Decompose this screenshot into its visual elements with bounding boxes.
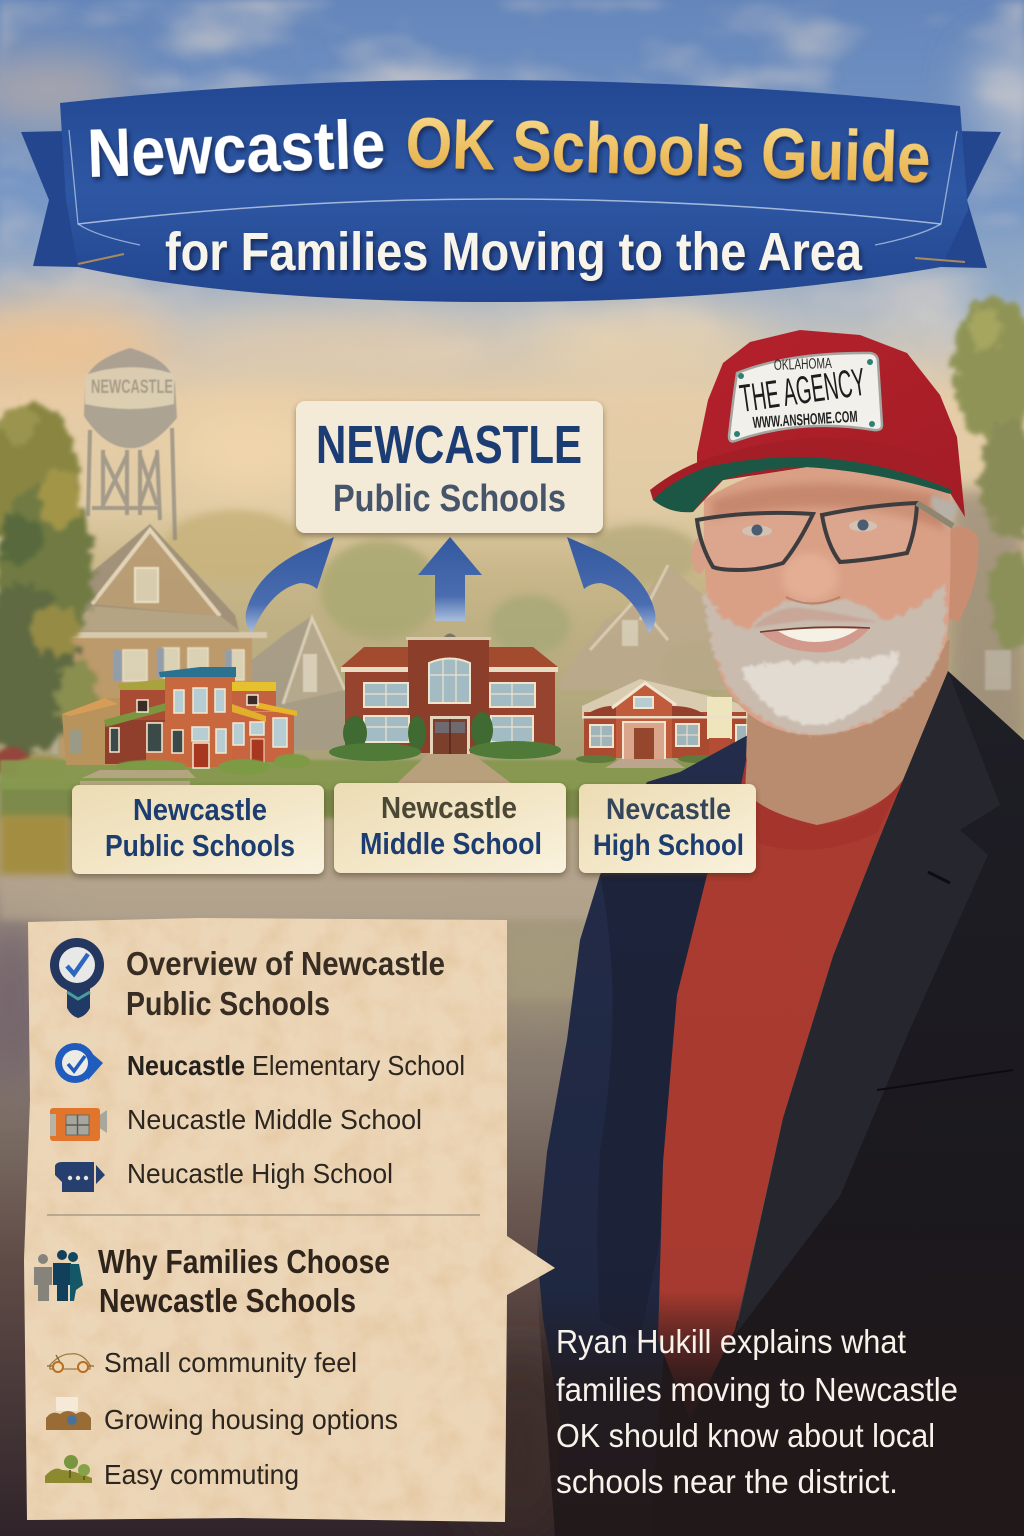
- cap: [650, 330, 965, 517]
- heading: overview: [126, 945, 445, 1022]
- heading: why families: [98, 1243, 390, 1319]
- caption: OK should know about local: [556, 1417, 935, 1454]
- district callout card: NEWCASTLE: [316, 415, 582, 475]
- face: [704, 462, 951, 735]
- presenter portrait: [537, 330, 1024, 1536]
- jacket: right lapel: [735, 671, 1000, 1335]
- eyes: [742, 526, 772, 536]
- water tower: [84, 348, 177, 540]
- cap plate: THE AGENCY: [737, 361, 868, 421]
- list item: elementary: Neucastle: [127, 1050, 245, 1081]
- list item: middle: [50, 1104, 422, 1141]
- cap plate: OKLAHOMA: [774, 355, 832, 374]
- jacket: right body: [640, 671, 1024, 1536]
- school label: Newcastle Middle School: [334, 783, 566, 873]
- school label: Newcastle Public Schools: Public Schools: [105, 828, 295, 863]
- caption: [556, 1323, 958, 1500]
- background houses: [52, 524, 735, 758]
- list item: community: Small community feel: [104, 1347, 357, 1378]
- list item: elementary: Elementary School: [252, 1050, 465, 1081]
- icon: family: [34, 1250, 83, 1301]
- shrubs and lawn: [0, 747, 30, 777]
- caption: schools near the district.: [556, 1463, 898, 1500]
- title banner: [21, 80, 1001, 302]
- arrow: left curved: [246, 537, 334, 633]
- red t-shirt: [658, 780, 903, 1420]
- list item: commuting: Easy commuting: [104, 1459, 299, 1490]
- banner tails: [21, 131, 78, 267]
- district callout card: Public Schools: [333, 478, 566, 520]
- parchment info panel: [24, 918, 555, 1522]
- school label: Newcastle Middle School: Middle School: [360, 826, 542, 861]
- nose: [786, 597, 840, 604]
- neck: [745, 640, 950, 825]
- district callout card: [296, 401, 603, 533]
- left tree: [0, 402, 100, 755]
- caption: families moving to Newcastle: [556, 1371, 958, 1408]
- list item: elementary: [55, 1043, 465, 1083]
- right tree: [953, 295, 1024, 650]
- cap plate: [729, 353, 882, 441]
- list item: housing: Growing housing options: [104, 1404, 398, 1435]
- icon: checkmark badge: [50, 938, 104, 1018]
- arrow: right curved: [567, 537, 655, 633]
- heading: why families: Newcastle Schools: [99, 1282, 356, 1319]
- heading: overview: Overview of Newcastle: [126, 945, 445, 982]
- water tower: NEWCASTLE: [91, 377, 173, 398]
- mouth: [760, 627, 870, 652]
- jacket: left body: [537, 735, 757, 1536]
- cap plate: WWW.ANSHOME.COM: [752, 409, 858, 432]
- beard: [705, 585, 946, 735]
- title banner: OK Schools Guide: [405, 104, 932, 199]
- school label: Newcastle Public Schools: Newcastle: [133, 792, 267, 827]
- list item: high: [55, 1158, 393, 1192]
- title line 1: Newcastle: [86, 106, 386, 192]
- school label: Nevcastle High School: High School: [593, 829, 744, 862]
- school label: Newcastle Public Schools: [72, 785, 324, 874]
- list item: middle: Neucastle Middle School: [127, 1104, 422, 1135]
- heading: overview: Public Schools: [126, 985, 330, 1022]
- ears: [692, 538, 706, 574]
- arrow: center up: [418, 537, 482, 621]
- glasses: [697, 503, 953, 570]
- list item: commuting: [45, 1455, 299, 1490]
- school building: middle: [329, 634, 561, 761]
- title line 2: for Families Moving to the Area: [165, 222, 863, 282]
- school building: left: [62, 667, 310, 785]
- school label: Nevcastle High School: Nevcastle: [606, 793, 731, 826]
- school label: Nevcastle High School: [579, 784, 756, 873]
- heading: why families: Why Families Choose: [98, 1243, 390, 1280]
- t-shirt collar: [740, 755, 903, 850]
- list item: housing: [46, 1397, 398, 1435]
- bottom shading: [537, 1290, 1024, 1536]
- caption: Ryan Hukill explains what: [556, 1323, 906, 1360]
- list item: high: Neucastle High School: [127, 1158, 393, 1189]
- distant trees: [165, 510, 740, 690]
- school building: right: [576, 679, 748, 768]
- school label: Newcastle Middle School: Newcastle: [381, 790, 517, 825]
